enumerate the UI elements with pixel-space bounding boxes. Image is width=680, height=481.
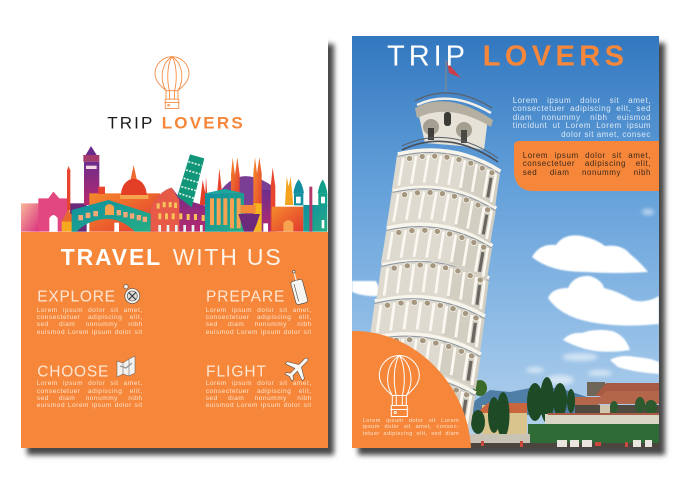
photo: clouds xyxy=(352,209,659,385)
text: explore body: sed diam nonummy nibh xyxy=(37,321,143,328)
text: intro paragraph: consectetuer adipiscing elit, sed xyxy=(513,104,651,113)
text: intro paragraph: dolor sit amet, consec xyxy=(561,130,651,139)
skyline illustration xyxy=(21,146,327,232)
icon: white balloon xyxy=(379,356,419,416)
photo: sky xyxy=(352,36,659,448)
heading: travel with us: TRAVEL xyxy=(61,244,160,270)
icon: map xyxy=(117,356,135,377)
text: choose body: Lorem ipsum dolor sit amet, xyxy=(37,380,143,387)
orange corner panel xyxy=(352,331,471,448)
text: choose body xyxy=(37,380,143,409)
text: choose body: euismod Lorem ipsum dolor sit xyxy=(37,402,143,409)
heading: choose: CHOOSE xyxy=(37,364,108,381)
text: intro paragraph: diam nonummy nibh euismod xyxy=(513,113,651,122)
orange callout box xyxy=(514,141,659,191)
photo: hills and trees xyxy=(471,377,590,438)
text: callout paragraph: sed diam nonummy nibh xyxy=(523,168,651,177)
heading: travel with us xyxy=(61,244,281,270)
text: intro paragraph: Lorem ipsum dolor sit amet, xyxy=(513,96,651,105)
text: callout paragraph xyxy=(523,151,651,177)
logo wordmark: TRIP xyxy=(107,114,152,133)
text: flight body: Lorem ipsum dolor sit amet, xyxy=(206,380,312,387)
text: intro paragraph xyxy=(512,96,651,139)
icon: hot air balloon logo xyxy=(155,57,189,108)
photo: flag on pole xyxy=(446,60,461,91)
text: corner paragraph: ipsum dolor sit amet, consec- xyxy=(363,424,459,430)
icon: airplane xyxy=(280,350,316,386)
text: callout paragraph: consectetuer adipiscing elit, xyxy=(523,159,651,168)
orange lower section xyxy=(21,232,328,448)
text: corner paragraph xyxy=(362,418,459,437)
icon: compass xyxy=(124,284,140,304)
text: prepare body: Lorem ipsum dolor sit amet, xyxy=(206,307,312,314)
text: callout paragraph: Lorem ipsum dolor sit amet, xyxy=(523,151,651,160)
title: trip lovers xyxy=(387,41,624,73)
heading: explore: EXPLORE xyxy=(37,289,115,306)
text: prepare body: sed diam nonummy nibh xyxy=(206,321,312,328)
title: trip lovers: LOVERS xyxy=(483,41,624,73)
text: choose body: consectetuer adipiscing elit, xyxy=(37,388,143,395)
text: choose body: sed diam nonummy nibh xyxy=(37,395,143,402)
text: prepare body: euismod Lorem ipsum dolor sit xyxy=(206,329,312,336)
logo wordmark: LOVERS xyxy=(162,114,243,133)
text: prepare body xyxy=(206,307,312,336)
photo: buildings xyxy=(545,382,659,425)
text: explore body xyxy=(37,307,143,336)
text: prepare body: consectetuer adipiscing elit, xyxy=(206,314,312,321)
text: explore body: consectetuer adipiscing elit, xyxy=(37,314,143,321)
icon: suitcase xyxy=(288,269,308,305)
text: intro paragraph: tincidunt ut Lorem Lorem ipsum xyxy=(513,121,651,130)
text: flight body: euismod Lorem ipsum dolor sit xyxy=(206,402,312,409)
text: flight body: sed diam nonummy nibh xyxy=(206,395,312,402)
title: trip lovers: TRIP xyxy=(387,41,465,73)
logo wordmark xyxy=(107,114,243,133)
text: flight body: consectetuer adipiscing elit, xyxy=(206,388,312,395)
text: explore body: Lorem ipsum dolor sit amet, xyxy=(37,307,143,314)
heading: prepare: PREPARE xyxy=(206,289,284,306)
text: corner paragraph: tetuer adipiscing elit, sed diam xyxy=(363,431,459,437)
panel: left flyer xyxy=(21,37,328,448)
panel: right flyer xyxy=(352,36,659,448)
photo: hedge and crowd xyxy=(470,424,659,448)
photo: leaning tower xyxy=(359,93,502,430)
heading: travel with us: WITH US xyxy=(173,244,281,270)
text: explore body: euismod Lorem ipsum dolor sit xyxy=(37,329,143,336)
text: flight body xyxy=(206,380,312,409)
text: corner paragraph: Lorem ipsum dolor sit Lorem xyxy=(363,418,459,424)
heading: flight: FLIGHT xyxy=(206,364,267,381)
